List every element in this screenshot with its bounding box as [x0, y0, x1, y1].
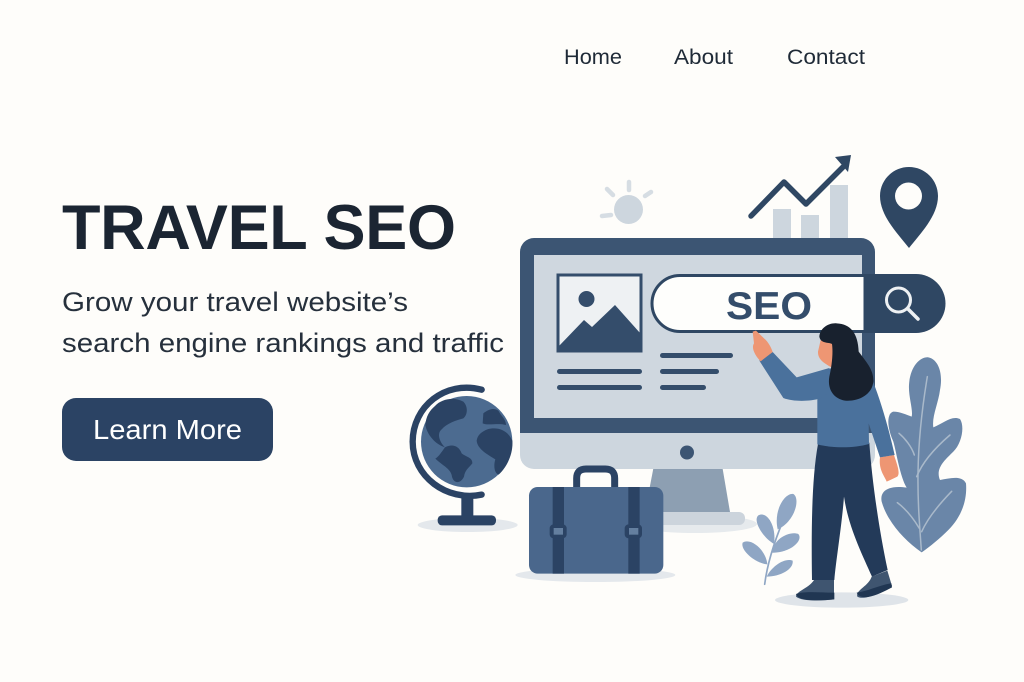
globe base	[461, 496, 473, 517]
button: learn more: Learn More	[93, 414, 242, 445]
icon: sun	[602, 182, 651, 224]
icon: location pin	[880, 167, 938, 248]
button: learn more	[62, 398, 273, 461]
person hand: pointing	[753, 331, 773, 361]
navigation: Home	[564, 46, 622, 69]
image placeholder icon	[558, 275, 641, 351]
suitcase handle	[577, 469, 615, 488]
globe arc	[413, 388, 482, 496]
text lines	[557, 353, 733, 390]
monitor chin	[520, 425, 875, 469]
title: TRAVEL SEO	[62, 193, 456, 263]
continents	[425, 399, 512, 482]
person arm: pointing	[759, 352, 830, 401]
person legs	[812, 443, 888, 580]
subtitle	[62, 287, 504, 358]
arrow: growth trend	[751, 155, 851, 216]
globe sphere	[421, 396, 512, 487]
monitor	[520, 238, 875, 533]
power button	[680, 446, 694, 460]
suitcase body	[529, 487, 663, 574]
suitcase straps	[550, 487, 642, 574]
person	[753, 323, 908, 608]
person torso	[817, 368, 895, 457]
person shadow	[775, 592, 908, 608]
icon: magnifier	[886, 288, 918, 319]
globe shadow	[418, 518, 518, 532]
pin hole	[895, 182, 922, 210]
person face	[818, 340, 837, 368]
suitcase	[515, 469, 675, 582]
subtitle: search engine rankings and traffic	[62, 328, 504, 358]
person shoes	[796, 571, 892, 600]
subtitle: Grow your travel website’s	[62, 287, 408, 317]
navigation: Contact	[787, 46, 865, 69]
search bar label: SEO	[726, 285, 812, 328]
suitcase shadow	[515, 568, 675, 582]
monitor frame	[520, 238, 875, 433]
navigation	[564, 46, 865, 69]
plant: large leaf	[881, 357, 966, 552]
search bar	[652, 274, 946, 333]
navigation: About	[674, 46, 733, 69]
person hand: right	[880, 455, 899, 482]
plant: small sprig	[742, 494, 800, 584]
screen	[534, 255, 862, 418]
monitor stand	[633, 465, 757, 533]
globe	[413, 388, 518, 532]
bar chart	[773, 185, 848, 241]
person hair	[819, 323, 873, 401]
